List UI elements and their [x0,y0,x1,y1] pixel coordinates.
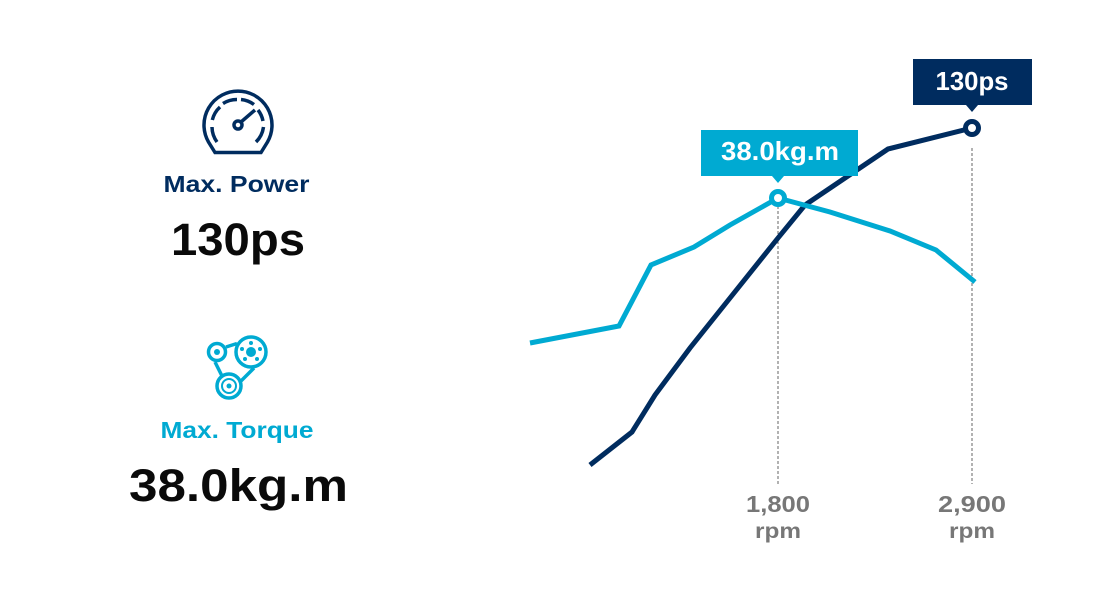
axis label: 1,800 rpm: 1,800 [746,491,810,517]
value: 38.0kg.m: 38.0kg.m [129,460,348,511]
dashed guide line 2900 rpm [971,148,973,484]
heading: max power: Max. Power [164,171,310,197]
axis label: 2,900 rpm [938,491,1006,543]
axis label: 2,900 rpm: 2,900 [938,491,1006,517]
curve: power [590,128,972,465]
marker: peak torque [772,192,784,204]
callout: 38.0kg.m [701,130,858,183]
axis label: 1,800 rpm [746,491,810,543]
marker: peak power [966,122,978,134]
icon: belt pulleys [208,337,266,398]
heading: max torque: Max. Torque [160,417,314,443]
callout: 130ps [913,59,1032,112]
panel: max torque [129,337,348,511]
callout: 38.0kg.m: 38.0kg.m [721,136,839,166]
curve: torque [530,198,975,343]
axis label: 1,800 rpm: rpm [755,520,801,543]
chart: power and torque curves [530,59,1032,543]
icon: speedometer [204,91,272,152]
axis label: 2,900 rpm: rpm [949,520,995,543]
callout: 130ps: 130ps [936,66,1008,96]
value: 130ps: 130ps [171,214,305,265]
panel: max power [164,91,310,265]
dashed guide line 1800 rpm [777,206,779,484]
